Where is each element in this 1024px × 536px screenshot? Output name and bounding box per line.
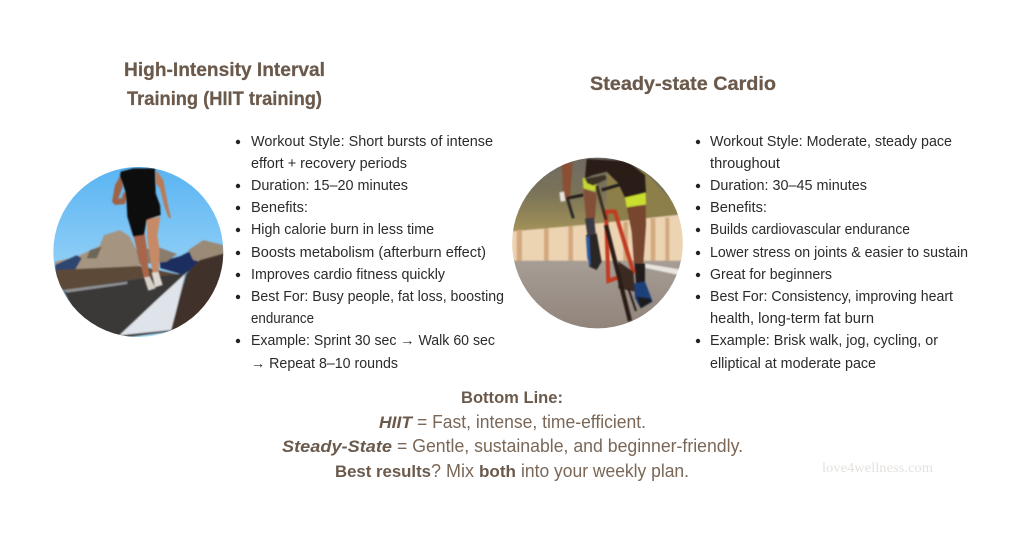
bullet list: HIIT details: Boosts metabolism (afterburn effect) — [251, 245, 486, 261]
bottom line summary: both — [479, 462, 516, 481]
bullet list: steady-state details: throughout — [710, 156, 780, 172]
bullet list: HIIT details: Duration: 15–20 minutes — [251, 178, 408, 194]
bottom line summary: into your weekly plan. — [521, 461, 689, 481]
panel: HIIT training — [50, 60, 504, 372]
bullet list: steady-state details: Benefits: — [710, 200, 767, 216]
photo: runner on a mountain road — [50, 163, 227, 340]
heading: HIIT — [124, 60, 325, 110]
bullet list: HIIT details: Example: Sprint 30 sec → Walk 60 sec — [251, 333, 495, 349]
bullet list: HIIT details: endurance — [251, 311, 314, 327]
bullet list: steady-state details: Example: Brisk walk, jog, cycling, or — [710, 333, 938, 349]
bullet list: HIIT details: Workout Style: Short bursts of intense — [251, 134, 493, 150]
bullet list: steady-state details: health, long-term fat burn — [710, 311, 874, 327]
rider — [559, 159, 653, 321]
photo: cyclist from behind — [510, 155, 687, 331]
bottom line summary: = Fast, intense, time-efficient. — [417, 412, 646, 432]
bullet list: HIIT details: effort + recovery periods — [251, 156, 407, 172]
bottom line summary: Best results — [335, 462, 431, 481]
bullet list: HIIT details: Improves cardio fitness quickly — [251, 267, 446, 283]
bullet list: steady-state details: Workout Style: Moderate, steady pace — [710, 134, 952, 150]
bottom line summary — [282, 388, 743, 481]
heading: Steady-state Cardio: Steady-state Cardio — [590, 74, 776, 95]
bottom line summary: Steady-State — [282, 437, 392, 456]
panel: Steady-state cardio — [510, 74, 968, 372]
bullet list: steady-state details: Lower stress on joints & easier to sustain — [710, 245, 968, 261]
bottom line summary: Bottom Line: — [461, 388, 563, 407]
bullet list: HIIT details: Best For: Busy people, fat loss, boosting — [251, 289, 504, 305]
bullet list: HIIT details: → Repeat 8–10 rounds — [251, 356, 398, 372]
bullet list: steady-state details: Duration: 30–45 minutes — [710, 178, 867, 194]
watermark: love4wellness.com — [822, 460, 934, 475]
bullet list: HIIT details: Benefits: — [251, 200, 308, 216]
bottom line summary: = Gentle, sustainable, and beginner-friendly. — [397, 436, 743, 456]
heading: HIIT: Training (HIIT training) — [127, 89, 322, 110]
infographic canvas — [53, 62, 968, 481]
bottom line summary: ? Mix — [431, 461, 474, 481]
heading: HIIT: High-Intensity Interval — [124, 60, 325, 81]
runner — [112, 168, 171, 291]
bullet list: steady-state details: elliptical at moderate pace — [710, 356, 876, 372]
bullet list: HIIT details: High calorie burn in less time — [251, 222, 434, 238]
bullet list: steady-state details: Builds cardiovascular endurance — [710, 222, 910, 238]
bullet list: steady-state details — [696, 134, 968, 372]
bullet list: steady-state details: Best For: Consistency, improving heart — [710, 289, 953, 305]
bullet list: HIIT details — [236, 134, 504, 372]
bottom line summary: HIIT — [379, 413, 414, 432]
bullet list: steady-state details: Great for beginners — [710, 267, 832, 283]
